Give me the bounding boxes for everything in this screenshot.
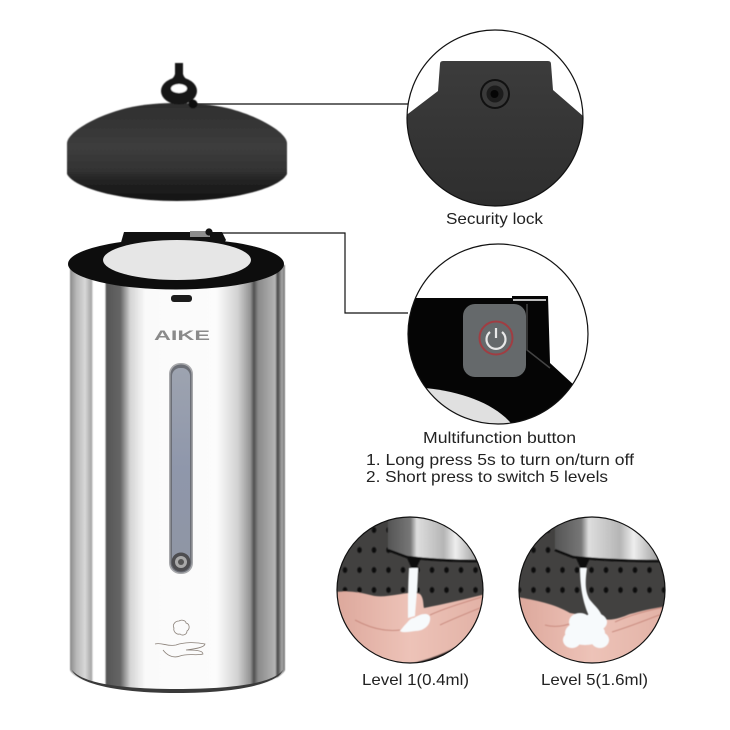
foam stream: [408, 568, 418, 618]
instructions text: 1. Long press 5s to turn on/turn off: [366, 452, 635, 469]
panel: security lock detail: [400, 30, 590, 215]
level window: [169, 363, 193, 574]
soap reservoir lid: [103, 240, 251, 280]
black housing: [408, 296, 572, 422]
hand: [520, 596, 662, 662]
nozzle: [407, 558, 421, 569]
nozzle: [576, 558, 590, 569]
connector line: dispenser to multifunction button: [208, 233, 408, 313]
caption: level 1: Level 1(0.4ml): [362, 672, 469, 689]
caption: level 5: Level 5(1.6ml): [541, 672, 648, 689]
black base line: [555, 550, 660, 561]
panel: multifunction button detail: [400, 244, 588, 430]
lid close-up: [408, 61, 582, 206]
dispenser bottom: [387, 518, 476, 560]
sensor ring: [172, 552, 190, 572]
foam blob: [563, 613, 609, 648]
shadow: [412, 646, 456, 662]
connector line: lid to security lock: [192, 103, 408, 105]
panel: level 1 foam photo: [335, 515, 490, 670]
panel: level 5 foam photo: [517, 515, 668, 670]
top black rim: [68, 238, 284, 290]
grey edge line: [527, 304, 550, 368]
bracket button highlight: [190, 231, 210, 237]
black base line: [388, 550, 480, 561]
foam blob: [400, 614, 430, 632]
security screw: [480, 79, 510, 109]
heading: multifunction button: Multifunction button: [423, 430, 576, 447]
brand logo: AIKE: [154, 328, 210, 343]
heading: security lock: Security lock: [446, 211, 544, 228]
wing knob: [161, 63, 198, 108]
top metal edge: [513, 299, 546, 301]
button dot: [205, 228, 213, 236]
hand: [338, 590, 482, 662]
instructions text: [366, 452, 635, 486]
dispenser body: [68, 228, 285, 693]
hand creases: [545, 607, 668, 632]
grey power button: [463, 304, 526, 377]
hand creases: [355, 597, 485, 631]
stainless cylinder: [70, 265, 285, 692]
dispenser bottom: [554, 518, 658, 561]
pegboard: [342, 527, 478, 594]
pegboard: [520, 531, 664, 594]
infrared sensor: [171, 295, 192, 302]
rear bracket: [120, 232, 226, 246]
base lip: [72, 670, 283, 693]
foam stream: [580, 568, 602, 618]
instructions text: 2. Short press to switch 5 levels: [366, 469, 608, 486]
lid silhouette: [67, 103, 287, 201]
icon: foam and hand: [155, 620, 205, 657]
white reservoir crescent: [426, 388, 510, 424]
lid with wing knob: [67, 63, 287, 201]
